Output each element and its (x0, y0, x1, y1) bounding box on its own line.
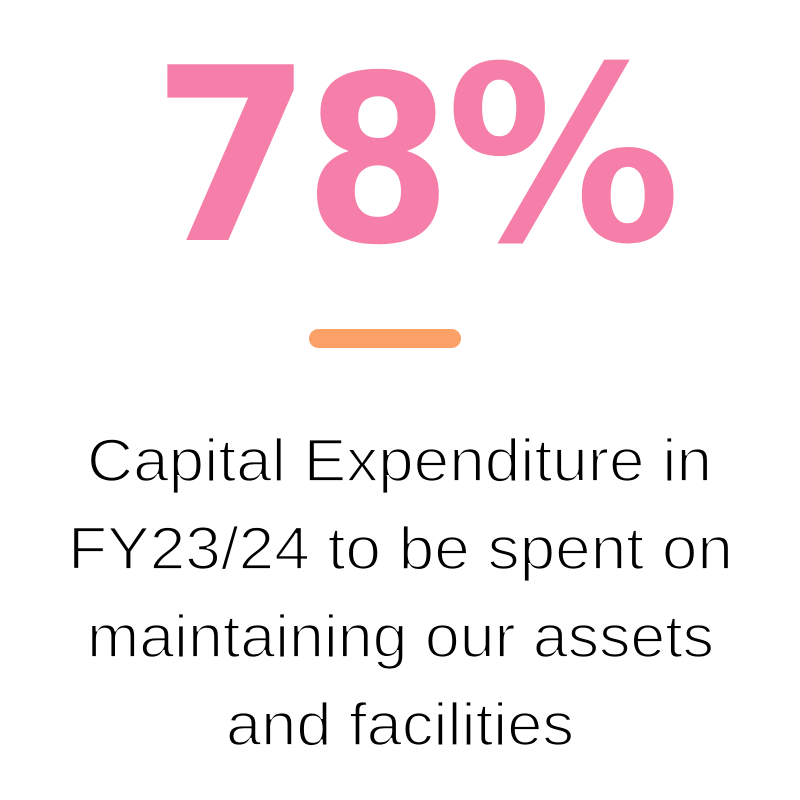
description text: Capital Expenditure in (87, 427, 712, 494)
description text: maintaining our assets (87, 603, 714, 670)
description text: and facilities (226, 691, 574, 758)
big stat: 78% (152, 15, 681, 298)
divider bar (309, 329, 461, 348)
description text (68, 427, 733, 758)
big stat: 78%: 7 (152, 16, 312, 297)
big stat: 78%: 8 (304, 26, 452, 296)
description text: FY23/24 to be spent on (68, 515, 733, 582)
big stat: 78%: % (446, 15, 681, 298)
